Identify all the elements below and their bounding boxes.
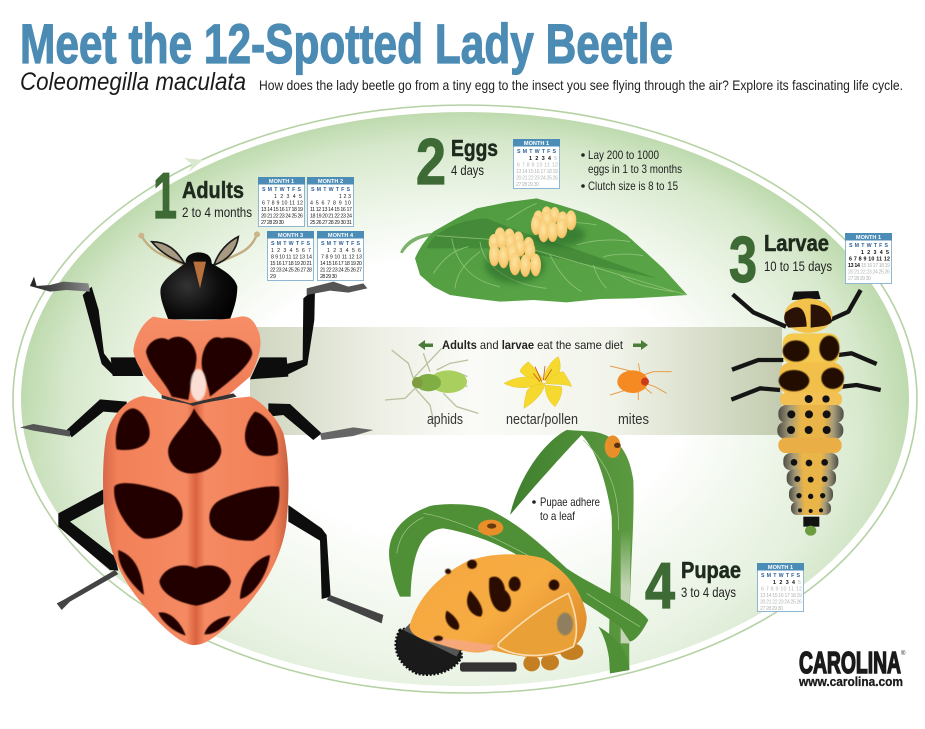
- thorax: [133, 316, 260, 405]
- calendar month 2: 4 5 6 7 8 9 10: [310, 200, 351, 206]
- front leaf fold: [598, 627, 629, 673]
- pupa scene: [389, 430, 648, 675]
- calendar month 1: 6 7 8 9 10 11 12: [262, 200, 303, 206]
- calendar month 4: 7 8 9 10 11 12 13: [321, 254, 362, 260]
- calendar: eggs: 27 28 29 30: [516, 182, 539, 188]
- calendar: pupae: 5: [798, 580, 801, 586]
- calendar month 1: 13 14 15 16 17 18 19: [261, 207, 303, 213]
- calendar month 3: 1 2 3 4 5 6 7: [271, 248, 311, 254]
- scientific name: Coleomegilla maculata: [20, 68, 246, 96]
- diet labels: [427, 411, 649, 428]
- calendar: pupae: [757, 563, 804, 612]
- calendar month 2: 11 12 13 14 15 16 17: [310, 207, 352, 213]
- calendar: larvae: 27 28 29 30: [848, 276, 871, 282]
- stage 2 heading: 4 days: [451, 162, 484, 178]
- stem: [400, 232, 497, 253]
- arrow on oval: [184, 158, 203, 172]
- calendar month 1: MONTH 1: [269, 179, 294, 185]
- title: Meet the 12-Spotted Lady Beetle: [20, 12, 673, 75]
- diet message: Adults and larvae eat the same diet: [442, 338, 624, 352]
- leaf: [415, 198, 687, 302]
- calendar month 3: [267, 231, 314, 280]
- diet band: [250, 327, 782, 435]
- calendar month 4: 21 22 23 24 25 26 27: [320, 268, 362, 274]
- calendar month 4: [317, 231, 364, 280]
- calendar: larvae: S M T W T F S: [849, 243, 888, 249]
- calendar: eggs: MONTH 1: [524, 141, 549, 147]
- collar: [162, 393, 237, 407]
- Carolina logo: www.carolina.com: [798, 675, 903, 689]
- calendar month 4: S M T W T F S: [321, 241, 360, 247]
- stage 4 heading: 3 to 4 days: [681, 584, 736, 600]
- calendar month 3: MONTH 3: [278, 233, 303, 239]
- calendar: larvae: 1 2 3 4 5: [861, 250, 889, 256]
- larva head: [784, 291, 832, 333]
- stage 1 heading: 1: [153, 159, 177, 232]
- stage 4 heading: Pupae: [681, 557, 741, 583]
- leaf veins: [433, 203, 687, 295]
- mite icon: [610, 363, 672, 400]
- calendar month 1: 20 21 22 23 24 25 26: [261, 214, 303, 220]
- pupa underside tint: [427, 638, 497, 652]
- larva thorax segments: [779, 333, 844, 394]
- lower egg clutch: [489, 227, 541, 277]
- calendars: adults: [258, 177, 364, 280]
- antennae: [138, 231, 260, 266]
- calendar month 3: 8 9 10 11 12 13 14: [271, 254, 312, 260]
- Carolina logo: ®: [901, 650, 906, 657]
- calendar month 3: S M T W T F S: [271, 241, 310, 247]
- calendar: eggs: 20 21 22 23 24 25 26: [516, 176, 558, 182]
- calendar: pupae: MONTH 1: [768, 565, 793, 571]
- calendar month 2: 25 26 27 28 29 30 31: [310, 220, 352, 226]
- pupa spots: [434, 560, 559, 641]
- legs: [20, 277, 383, 623]
- calendar month 2: MONTH 2: [318, 179, 343, 185]
- pupa base: [396, 623, 517, 675]
- calendar month 3: 22 23 24 25 26 27 28: [270, 268, 312, 274]
- tall leaf blade: [510, 430, 634, 673]
- pupa body: [409, 554, 587, 657]
- calendar month 2: 1 2 3: [339, 194, 351, 200]
- stage 4 heading: [645, 549, 741, 622]
- diet labels: aphids: [427, 411, 463, 428]
- small pupa on upper leaf: [605, 435, 621, 458]
- calendar: larvae: 6 7 8 9 10 11 12: [849, 256, 890, 262]
- stage 1 heading: [153, 159, 252, 232]
- calendar: pupae: 27 28 29 30: [760, 606, 783, 612]
- small pupa on lower leaf: [478, 520, 503, 536]
- calendar month 1: 27 28 29 30: [261, 220, 284, 226]
- larva legs: [731, 290, 881, 400]
- calendar: eggs: 1 2 3 4: [529, 156, 551, 162]
- aphid icon: [385, 348, 478, 420]
- calendar: larvae: 20 21 22 23 24 25 26: [848, 270, 890, 276]
- calendar month 2: [307, 177, 354, 226]
- calendar month 4: MONTH 4: [328, 233, 354, 239]
- stage 3 heading: 3: [729, 223, 757, 296]
- stage 2 heading: Eggs: [451, 135, 498, 161]
- calendar month 4: 14 15 16 17 18 19 20: [320, 261, 362, 267]
- leaf stem highlight: [621, 530, 631, 643]
- eggs facts: eggs in 1 to 3 months: [588, 162, 682, 176]
- thorax spots: [146, 337, 252, 400]
- calendar: eggs: 5: [554, 156, 557, 162]
- pupae note: [532, 495, 600, 523]
- calendar: larvae: [845, 233, 892, 284]
- mouth stripe: [193, 262, 206, 288]
- head: [160, 252, 237, 319]
- calendar month 4: 1 2 3 4 5 6: [327, 248, 361, 254]
- eggs facts: Lay 200 to 1000: [588, 148, 659, 162]
- calendar: larvae: 13 14: [848, 263, 860, 269]
- calendar: eggs: 6 7 8 9 10 11 12: [517, 162, 558, 168]
- thorax highlight: [190, 369, 206, 401]
- calendar: eggs: [513, 139, 560, 188]
- stage 4 heading: 4: [645, 549, 675, 622]
- flower icon: [504, 357, 572, 408]
- calendar: eggs: 13 14 15 16 17 18 19: [516, 169, 558, 175]
- calendar month 1: S M T W T F S: [262, 187, 301, 193]
- larva abdomen segments: [777, 393, 844, 515]
- leaf veins: [397, 440, 640, 627]
- calendar month 2: S M T W T F S: [311, 187, 350, 193]
- pupae note: Pupae adhere: [540, 495, 600, 509]
- calendar month 3: 29: [270, 274, 276, 280]
- calendar: pupae: 13 14 15 16 17 18 19: [760, 593, 802, 599]
- calendar: pupae: S M T W T F S: [761, 573, 800, 579]
- pupa feet: [523, 643, 583, 671]
- adult beetle: [20, 231, 383, 645]
- stage 2 heading: [416, 125, 498, 198]
- arching leaf blade: [389, 504, 648, 642]
- Carolina logo: [798, 645, 906, 689]
- leaf with eggs: [400, 198, 687, 302]
- calendar month 3: 15 16 17 18 19 20 21: [270, 261, 312, 267]
- calendar: larvae: 15 16 17 18 19: [861, 263, 890, 269]
- wing cover spots: [114, 408, 279, 636]
- calendar: pupae: 1 2 3 4: [773, 580, 795, 586]
- calendar: eggs: S M T W T F S: [517, 149, 556, 155]
- wing covers: [103, 396, 289, 645]
- calendar month 1: [258, 177, 305, 226]
- stage 3 heading: [729, 223, 832, 296]
- calendar: pupae: 6 7 8 9 10 11 12: [761, 586, 802, 592]
- stage 3 heading: Larvae: [764, 230, 829, 256]
- larva tail: [803, 517, 819, 536]
- leaf fold shadow: [427, 218, 657, 278]
- stage 3 heading: 10 to 15 days: [764, 258, 832, 274]
- diet labels: mites: [618, 411, 649, 428]
- stage 1 heading: Adults: [182, 177, 244, 203]
- calendar: pupae: 20 21 22 23 24 25 26: [760, 600, 802, 606]
- stage 2 heading: 2: [416, 125, 446, 198]
- calendar: larvae: MONTH 1: [856, 235, 881, 241]
- diet labels: nectar/pollen: [506, 411, 578, 428]
- background oval: [13, 105, 917, 693]
- egg clutch shadows: [485, 223, 585, 283]
- calendar month 4: 28 29 30: [320, 274, 337, 280]
- pupae note: to a leaf: [540, 509, 576, 523]
- stage 1 heading: 2 to 4 months: [182, 204, 252, 220]
- calendar month 1: 1 2 3 4 5: [274, 194, 302, 200]
- upper egg clutch: [531, 206, 576, 242]
- calendar month 2: 18 19 20 21 22 23 24: [310, 214, 352, 220]
- larva: [731, 290, 881, 536]
- eggs facts: Clutch size is 8 to 15: [588, 179, 678, 193]
- eggs facts: [581, 148, 682, 193]
- pupa wing case: [498, 593, 576, 655]
